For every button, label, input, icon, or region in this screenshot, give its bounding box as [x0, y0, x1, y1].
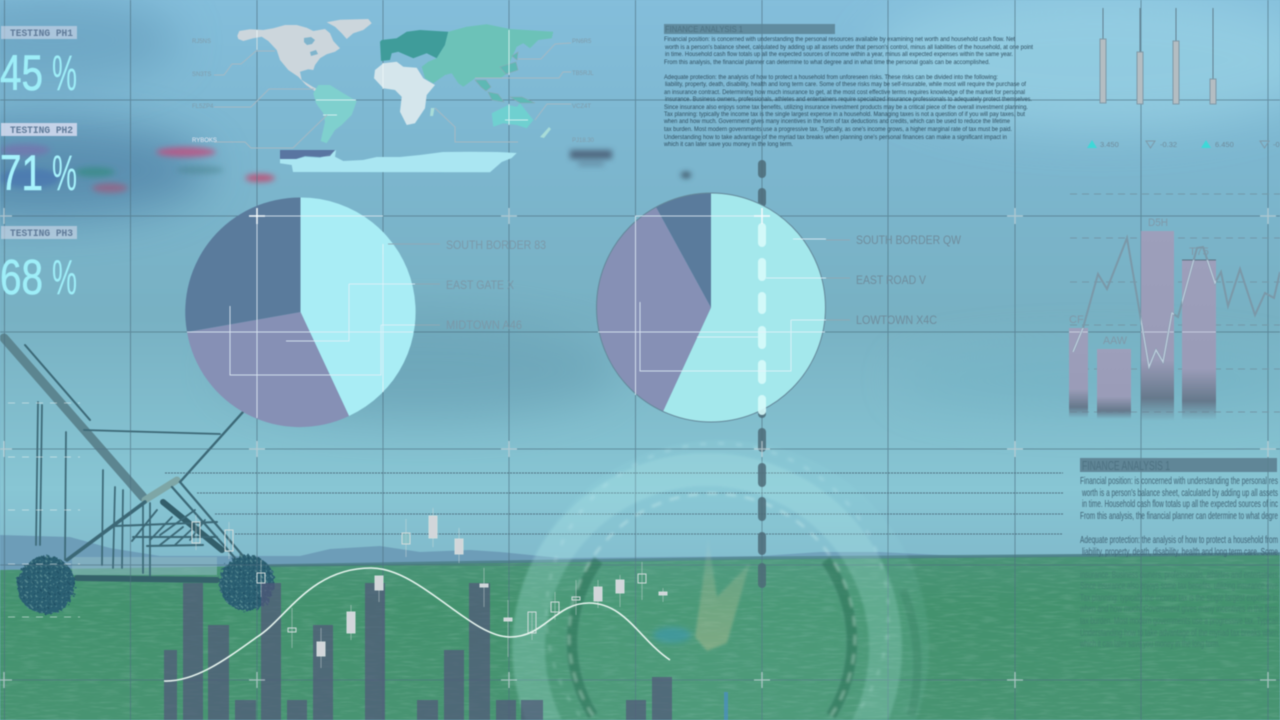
pie 1 labels: MIDTOWN A46 — [446, 318, 522, 332]
testing phase 3 label: TESTING PH3 — [10, 229, 73, 240]
finance analysis text block top: Since insurance also enjoys some tax benefits, utilizing insurance investment products may be a critical piece of the overall investment planning. — [664, 104, 1028, 111]
testing phase 3 label — [1, 226, 77, 240]
pie 1 labels: SOUTH BORDER 83 — [446, 238, 546, 252]
finance analysis text block right: FINANCE ANALYSIS 1 — [1082, 458, 1170, 473]
land: southeast asia and islands — [475, 52, 535, 103]
gauge centre marker — [653, 627, 728, 720]
radial gauge rings — [512, 440, 929, 720]
finance analysis text block top: worth is a person's balance sheet, calculated by adding up all assets under that person's control, minus all liabilities of the household, at one point — [664, 44, 1033, 51]
map labels: VCZ4T — [572, 104, 591, 110]
map labels: SN3TS — [192, 72, 211, 78]
finance analysis text block top: Financial position: is concerned with understanding the personal resources available by examining net worth and household cash flow. Net — [664, 36, 1015, 43]
gauge needle — [695, 537, 750, 651]
pie 2 labels: EAST ROAD V — [856, 273, 926, 287]
bottom bar chart — [164, 583, 672, 720]
testing phase 2 value: % — [52, 145, 77, 201]
map labels — [192, 39, 595, 144]
testing phase 3 value: 68 — [0, 251, 43, 305]
map labels: RJ5NS — [192, 39, 211, 45]
land: asia — [422, 24, 553, 87]
map labels: TB5RJL — [572, 71, 594, 77]
finance analysis text block top: FINANCE ANALYSIS 1 — [665, 24, 743, 34]
testing phase 1 value: 45 — [0, 45, 43, 101]
price change indicators: -0 — [1273, 140, 1280, 149]
white curve — [164, 568, 670, 681]
right bar chart: D5H — [1148, 217, 1168, 229]
irrigation machine — [4, 338, 275, 614]
testing phase 2 label — [1, 123, 77, 137]
map highlights — [257, 30, 528, 125]
right bar chart: CF — [1069, 314, 1084, 326]
testing phase 2 value: 71 — [0, 145, 43, 201]
finance analysis text block top: tax burden. Most modern governments use a progressive tax. Typically, as one's income grows, a higher marginal rate of tax must be paid. — [664, 126, 1012, 133]
right bar chart: T75 — [1189, 246, 1209, 258]
bottom candlesticks — [192, 508, 667, 668]
color smears — [0, 144, 691, 193]
finance analysis text block top: From this analysis, the financial planner can determine to what degree and in what time the personal goals can be accomplished. — [664, 59, 990, 66]
land: greenland — [327, 19, 372, 39]
bright crosshairs over pies — [249, 208, 770, 224]
top right candlesticks — [1100, 8, 1216, 104]
pie 1 grid highlights and connectors — [187, 209, 415, 418]
pie 2 grid highlights and connectors — [598, 216, 826, 395]
map labels: PJ18.30 — [572, 138, 595, 144]
map leader lines — [214, 43, 571, 148]
map labels: FL5ZP4 — [192, 104, 214, 110]
crosshair markers — [0, 208, 1276, 688]
pie 2 labels: LOWTOWN X4C — [856, 313, 937, 327]
testing phase 2 label: TESTING PH2 — [10, 126, 73, 137]
dark strip behind antarctica — [280, 150, 335, 159]
land: africa — [374, 62, 435, 125]
finance analysis text block top: Adequate protection: the analysis of how to protect a household from unforeseen risks. These risks can be divided into the following: — [664, 74, 998, 81]
dashed white marks over pie 2 — [758, 223, 766, 415]
finance analysis text block top: Tax planning: typically the income tax is the single largest expense in a household. Managing taxes is not a question of if you will pay taxes, but — [664, 111, 1025, 118]
testing phase 1 value: % — [52, 45, 77, 101]
map labels: PN6R5 — [572, 39, 592, 45]
price change indicators: -0.32 — [1160, 140, 1177, 149]
dotted and dashed guide lines — [8, 194, 1280, 617]
pie chart 2 — [596, 193, 826, 422]
land: new zealand and madagascar — [430, 108, 551, 138]
right bar chart — [1069, 217, 1280, 421]
pie 1 labels: EAST GATE X — [446, 278, 514, 292]
vertical pill chain — [758, 160, 766, 588]
finance analysis text block top: when and how much. Government gives many incentives in the form of tax deductions and credits, which can be used to reduce the lifetime — [663, 118, 1010, 125]
price change indicators: 3.450 — [1100, 140, 1119, 149]
finance analysis text block top — [663, 24, 1033, 148]
finance analysis text block top: Understanding how to take advantage of the myriad tax breaks when planning one's personal finances can make a significant impact in — [664, 134, 1007, 141]
pie 1 labels — [446, 238, 546, 332]
finance analysis text block top: an insurance contract. Determining how much insurance to get, at the most cost effective terms requires knowledge of the market for personal — [664, 89, 1025, 96]
pie 1 leader lines — [388, 244, 440, 325]
land: south america — [313, 85, 357, 143]
right bar chart: AAW — [1103, 335, 1128, 347]
finance analysis text block top: liability, property, death, disability, health and long term care. Some of these risks may be self-insurable, while most will require the purchase of — [665, 81, 1026, 88]
finance analysis text block top: insurance. Business owners, professionals, athletes and entertainers require specialized insurance professionals to adequately protect themselves. — [665, 96, 1032, 103]
testing phase 3 value: % — [52, 251, 77, 305]
finance analysis text block top: in time. Household cash flow totals up all the expected sources of income within a year, minus all expected expenses within the same year. — [665, 51, 1013, 58]
land: australia — [492, 103, 533, 128]
finance analysis text block right — [1079, 458, 1278, 650]
pie 2 labels — [856, 233, 962, 327]
world map — [192, 19, 595, 172]
line overlay on bar chart — [1073, 238, 1280, 367]
map labels: RYBOKS — [192, 138, 217, 144]
pie 2 labels: SOUTH BORDER QW — [856, 233, 962, 247]
testing phase 1 label — [1, 26, 77, 40]
hudson bay and great lakes — [304, 37, 318, 56]
price change indicators — [1087, 140, 1280, 149]
pie 2 leader lines — [826, 240, 850, 320]
pie chart 1 — [185, 197, 416, 427]
finance analysis text block top: which it can later save you money in the long term. — [663, 141, 793, 148]
testing phase 1 label: TESTING PH1 — [10, 29, 73, 40]
land: north america — [237, 25, 340, 92]
land: europe and russia — [380, 30, 448, 61]
price change indicators: 6.450 — [1215, 140, 1234, 149]
land: antarctica — [280, 150, 517, 172]
